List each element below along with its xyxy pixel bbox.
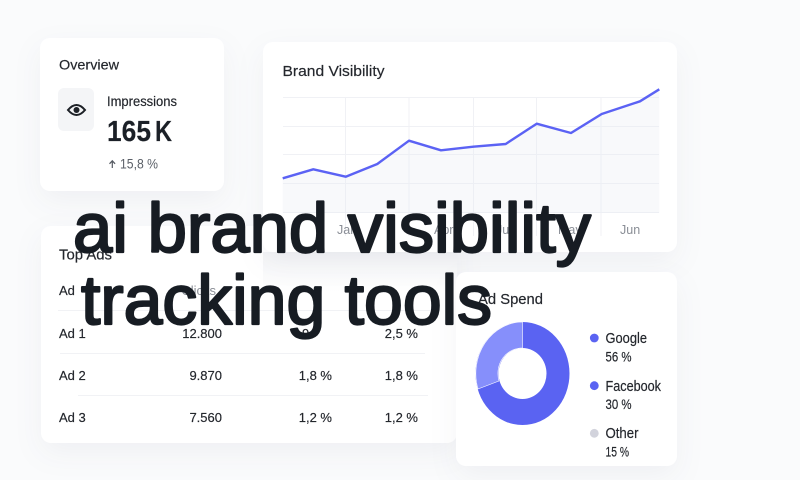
row: ad 2: 1,8 % (299, 368, 332, 383)
label: impressions: Impressions (107, 94, 177, 109)
row: ad 3: Ad 3 (59, 410, 86, 425)
legend: other: Other (606, 426, 639, 442)
panel: ad spend (456, 272, 677, 466)
row: ad 2: 1,8 % (385, 368, 418, 383)
metric: 165K: K (155, 116, 172, 148)
donut chart (476, 322, 570, 425)
legend: other (590, 426, 639, 460)
title: tracking tools (81, 261, 492, 339)
row: ad 1: 12.800 (182, 326, 222, 341)
heading: overview: Overview (59, 56, 120, 72)
row: ad 3: 1,2 % (299, 410, 332, 425)
line chart (283, 89, 659, 237)
legend: facebook: 30 % (606, 397, 632, 412)
axis labels: Jan (337, 223, 357, 237)
table header: Clicks (181, 283, 216, 298)
title: ai brand visibility (73, 189, 591, 267)
heading: ad spend: Ad Spend (478, 291, 543, 308)
title (73, 189, 591, 339)
row: ad 1: 9 (302, 326, 309, 341)
panel: top ads table (41, 226, 457, 443)
table header (59, 283, 216, 298)
change: up 15.8 percent: 15,8 % (120, 156, 158, 172)
row: ad 1: Ad 1 (59, 326, 86, 341)
row: ad 3: 1,2 % (385, 410, 418, 425)
panel: overview (40, 38, 224, 191)
axis labels: Jun (496, 223, 516, 237)
row: ad 1: 2,5 % (385, 326, 418, 341)
legend: google (590, 331, 647, 364)
axis labels (337, 223, 640, 237)
axis labels: May (558, 223, 582, 237)
metric: 165K: 165 (107, 116, 151, 148)
legend: google: Google (606, 331, 647, 347)
row: ad 2 (59, 368, 418, 383)
row: ad 3 (59, 410, 418, 425)
legend: other: 15 % (606, 444, 629, 460)
legend: facebook (590, 379, 662, 412)
panel: brand visibility chart (263, 42, 677, 252)
row: ad 2: 9.870 (189, 368, 222, 383)
icon: eye (58, 88, 94, 131)
heading: top ads: Top Ads (59, 248, 112, 264)
legend: facebook: Facebook (606, 379, 662, 395)
row: ad 3: 7.560 (189, 410, 222, 425)
row: ad 2: Ad 2 (59, 368, 86, 383)
row: ad 1 (59, 326, 418, 341)
axis labels: Apr (434, 223, 453, 237)
table header: Ad (59, 283, 75, 298)
axis labels: Jun (620, 223, 640, 237)
heading: brand visibility: Brand Visibility (282, 63, 385, 80)
legend: google: 56 % (606, 350, 632, 364)
